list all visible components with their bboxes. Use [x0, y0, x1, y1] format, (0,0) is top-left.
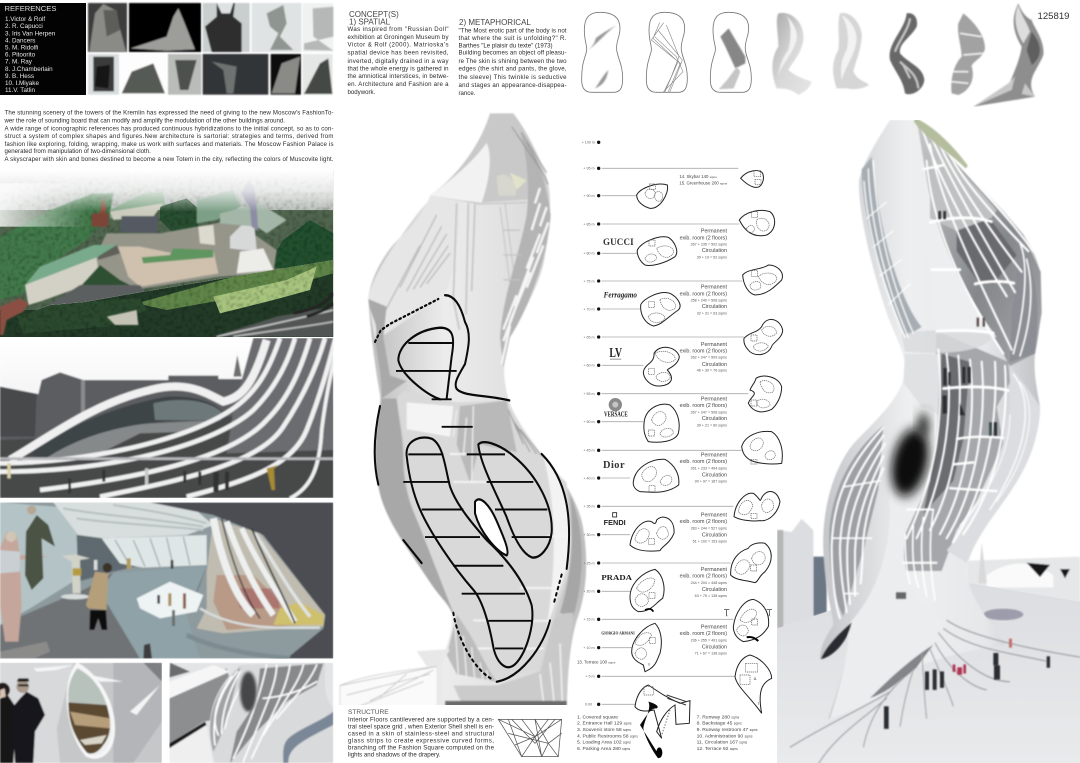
- text: Prada room data: exib. room (2 floors): [680, 574, 727, 580]
- plan: level 30: [630, 517, 674, 551]
- level markers: + 90 m: [583, 194, 595, 198]
- plan: level 40: [633, 459, 679, 492]
- legend: ground floor left: 5. Loading Area 102 sqms: [577, 740, 631, 746]
- text: Louis Vuitton room data: exib. room (2 floors): [680, 349, 727, 355]
- text: Versace room data: [680, 396, 728, 427]
- section markers A: [724, 609, 772, 618]
- text block: spatial: spatial device has been revisited,: [348, 50, 449, 56]
- level markers lower: [583, 449, 742, 707]
- text: Ferragamo room data: [680, 284, 728, 315]
- level markers: + 65 m: [583, 335, 595, 339]
- heading: concepts: CONCEPT(S): [349, 10, 399, 19]
- diagram: doll outline with swirl: [710, 12, 751, 92]
- dark void in facade: [885, 413, 935, 502]
- text: Louis Vuitton room data: Circulation: [702, 362, 727, 368]
- site plan: level 0: [635, 685, 690, 758]
- logo: Dior: Dior: [603, 460, 625, 471]
- text: Armani room data: 71 + 67 = 138 sqms: [695, 652, 727, 656]
- context: plaza ground: [777, 583, 1080, 763]
- plan: level 10: [632, 623, 661, 672]
- text block: spatial: [348, 26, 449, 96]
- list of references: 10. I.Miyake: [5, 80, 39, 87]
- logo: Louis Vuitton: [609, 346, 622, 361]
- model: pale volume two: [833, 13, 869, 89]
- void: white opening: [475, 499, 508, 555]
- plan: level 65: [744, 319, 783, 355]
- text block: intro: fashion like exploring, folding, wrapping, make us work with surfaces and materials. The Moscow Fashion Palace is: [4, 141, 334, 148]
- text block: intro: A skyscraper with skin and bones destined to become a new Totem in the city, reflecting the colors of Muscovite light.: [4, 156, 334, 163]
- level markers lower: + 5 m: [585, 675, 595, 679]
- text: Ferragamo room data: Circulation: [702, 304, 727, 310]
- text block: intro: The stunning scenery of the towers of the Kremlin has expressed the need of giving to the new Moscow's FashionTo-: [4, 110, 334, 116]
- level markers lower: + 10 m: [583, 646, 595, 650]
- panel: concepts text: [348, 10, 567, 97]
- text block: structure: cased in a skin of stainless-steel and structural: [348, 730, 494, 738]
- project number: 125819: [1038, 11, 1070, 22]
- plan: level 70: [641, 293, 680, 326]
- text block: metaphorical: "The Most erotic part of the body is not: [458, 28, 567, 34]
- text block: metaphorical: that where the suit is unfolding?" R.: [458, 35, 567, 42]
- heading: references: REFERENCES: [4, 4, 56, 13]
- plan: level 85: [739, 210, 775, 236]
- floor lines: [396, 343, 552, 648]
- plan: level 5: [735, 655, 772, 713]
- text: Louis Vuitton room data: Permanent: [701, 342, 728, 348]
- legend: ground floor left: [577, 714, 638, 752]
- level markers lower: + 20 m: [583, 590, 595, 594]
- diagram: doll outline with lines: [646, 12, 687, 92]
- text: Dior room data: Circulation: [702, 472, 727, 478]
- text: Fendi room data: Circulation: [702, 532, 727, 538]
- level markers: + 55 m: [583, 392, 595, 396]
- level markers lower: 0.00: [585, 703, 592, 707]
- text: Fendi room data: 283 + 244 = 527 sqms: [691, 526, 727, 530]
- list of references: 3. Iris Van Herpen: [5, 30, 56, 38]
- text: Versace room data: Permanent: [701, 396, 728, 402]
- text block: metaphorical: [458, 28, 567, 97]
- chart: floor plans by level: [577, 140, 783, 758]
- legend: ground floor left: 2. Entrance Hall 129 sqms: [577, 721, 632, 727]
- text: terrace level 10: 13. Terrace 100 sqms: [577, 659, 616, 664]
- text: Dior room data: 261 + 233 = 494 sqms: [691, 467, 727, 471]
- plan: level 5: 7: [757, 702, 759, 706]
- plan cut: dotted section: [375, 299, 438, 342]
- panel: references list: [0, 3, 86, 95]
- text block: structure: lights and shadows of the drapery.: [348, 752, 441, 758]
- people on floors and plaza: [884, 211, 1050, 729]
- legend: ground floor right: 9. Runway restroom 47 sqms: [697, 727, 758, 733]
- list of references: 8. J.Chamberlain: [5, 66, 53, 73]
- text block: metaphorical: the sleeve) This twinkle is seductive: [458, 74, 567, 81]
- text block: metaphorical: edges (the shirt and pants, the glove,: [458, 66, 567, 72]
- heading: spatial: 1) SPATIAL: [349, 17, 391, 26]
- text block: spatial: inverted, digitally drained in a way: [348, 58, 449, 65]
- plan: level 75: [743, 265, 782, 295]
- text block: metaphorical: rance.: [458, 90, 476, 97]
- level markers: + 50 m: [583, 420, 595, 424]
- text: Prada room data: Permanent: [701, 567, 728, 573]
- section markers A: A: [726, 614, 728, 618]
- logo: Fendi: [604, 513, 626, 527]
- text block: metaphorical: Building becomes an object off pleasu-: [458, 50, 566, 56]
- plan: level 45: [742, 431, 782, 464]
- text: brands Gucci room data: exib. room (2 floors): [680, 235, 727, 241]
- logo: Fendi: FENDI: [604, 518, 626, 527]
- text block: intro: [4, 110, 334, 163]
- skirt ribs fanning over the plaza: [790, 620, 1080, 763]
- greenery on top: [915, 120, 967, 167]
- legend: ground floor right: 10. Administration 90 sqms: [697, 733, 753, 739]
- text: Prada room data: 63 + 75 = 138 sqms: [695, 594, 727, 598]
- diagram: doll outline with creases: [582, 12, 623, 92]
- text: Dior room data: exib. room (2 floors): [680, 459, 727, 465]
- logo: Versace: [604, 398, 628, 419]
- plan: level 80: [637, 237, 677, 265]
- level markers lower: + 35 m: [583, 505, 595, 509]
- level markers: + 95 m: [583, 167, 595, 171]
- text block: spatial: the amniotical interstices, in betwe-: [348, 73, 448, 80]
- list of references: 6. Pitoorito: [5, 52, 36, 58]
- tower body: [820, 120, 1042, 719]
- text block: spatial: exhibition at Groningen Museum by: [348, 34, 449, 41]
- list of references: 7. M. Ray: [5, 58, 33, 66]
- level lines and labels upper: [582, 140, 783, 427]
- text block: spatial: that the whole energy is gathered in: [348, 66, 448, 72]
- photo: gallery interior with mannequins: [0, 502, 333, 659]
- logo: Versace: VERSACE: [604, 411, 628, 419]
- outer shell strokes: [375, 406, 569, 682]
- text block: intro: generated from manipulation of two-dimensional cloth.: [4, 148, 151, 155]
- text: Dior room data: [680, 453, 728, 484]
- plan cut: left ribbon floors: [407, 438, 532, 667]
- text: Fendi room data: [680, 513, 728, 544]
- logo: Ferragamo: Ferragamo: [603, 290, 637, 299]
- level markers: + 60 m: [583, 364, 595, 368]
- text: Versace room data: exib. room (2 floors): [680, 403, 727, 409]
- legend: ground floor left: 4. Public Restrooms 58 sqms: [577, 733, 638, 739]
- model: dark helix: [890, 13, 924, 94]
- context: bridge and buildings: [777, 519, 1080, 628]
- diagrams: concept evolution sequence: [582, 3, 1043, 107]
- level markers lower: + 40 m: [583, 476, 595, 480]
- heading: metaphorical: 2) METAPHORICAL: [459, 18, 531, 27]
- list of references: [5, 16, 56, 94]
- text block: metaphorical: and stages an appearance-disappea-: [458, 82, 566, 89]
- photo: view of the tower from a roof: [169, 663, 333, 763]
- text block: spatial: en. Architecture and Fashion are a: [348, 81, 449, 88]
- plan: level 35: [734, 491, 780, 521]
- model: floors helix: [951, 13, 985, 95]
- text: Ferragamo room data: 32 + 31 = 63 sqms: [697, 311, 727, 315]
- plan: level 15: [733, 599, 769, 642]
- text block: spatial: Was inspired from "Russian Doll": [348, 26, 448, 33]
- level markers: + 75 m: [583, 279, 595, 283]
- plan: level 50: [644, 404, 679, 442]
- photo: aerial view of the Kremlin: [0, 170, 333, 337]
- text block: structure: glass strips to create expressive curved forms,: [348, 738, 494, 744]
- plan: level 25: [731, 543, 771, 583]
- section drawing: central tower cutaway: [340, 113, 586, 728]
- diagram: space grid: [498, 719, 562, 757]
- photo: exterior plaza view with ribbons: [0, 338, 335, 498]
- text: Ferragamo room data: 258 + 240 = 508 sqms: [691, 298, 727, 302]
- model: pale volume one: [772, 13, 812, 95]
- text: Armani room data: 236 + 255 = 491 sqms: [691, 639, 727, 643]
- legend: ground floor left: 1. Covered square: [577, 714, 618, 720]
- plan cut: upper floor outline: [398, 328, 453, 399]
- list of references: 11.V. Tatlin: [5, 87, 35, 94]
- text: Prada room data: [680, 567, 728, 598]
- legend: ground floor right: [697, 714, 758, 752]
- level markers: [582, 140, 748, 424]
- text block: metaphorical: Barthes "Le plaisir du texte" (1973): [458, 42, 553, 50]
- list of references: 9. B. Hess: [5, 73, 34, 80]
- plan: level 10: b: [648, 663, 650, 667]
- text: Ferragamo room data: exib. room (2 floors): [680, 291, 727, 297]
- plan: level 55: [748, 376, 782, 412]
- text: skybar and greenhouse: 15. Greenhouse 200 sqms: [679, 180, 728, 185]
- text: Dior room data: 90 + 97 = 187 sqms: [695, 480, 727, 484]
- plan: level 20: [630, 569, 664, 612]
- text: brands Gucci room data: [680, 229, 728, 259]
- list of references: 1.Victor & Rolf: [5, 16, 45, 23]
- text: Armani room data: exib. room (2 floors): [680, 631, 727, 637]
- model: final tower form: [973, 3, 1043, 107]
- level markers: + 70 m: [583, 307, 595, 311]
- plan cut: upper wall outline: [445, 295, 509, 400]
- panel: reference thumbnails: [88, 3, 333, 95]
- photo: interior with visitors and oval window: [0, 663, 162, 763]
- text: brands Gucci room data: 267 + 235 = 502 sqms: [691, 243, 727, 247]
- legend: ground floor right: 12. Terrace 92 sqms: [697, 746, 738, 752]
- level markers: + 80 m: [583, 252, 595, 256]
- text: brands Gucci room data: Permanent: [701, 229, 728, 235]
- plan cut: right ribbon floors: [478, 442, 552, 558]
- level markers lower: + 30 m: [583, 533, 595, 537]
- text block: intro: A wide range of iconographic references has produced continuous hybridizations to the initial concept, so as to con-: [4, 126, 333, 132]
- level markers lower: + 25 m: [583, 561, 595, 565]
- text block: intro: wer the role of sounding board that can modify and amplify the modulation of the other buildings around.: [4, 118, 285, 124]
- text block: spatial: Victor & Rolf (2000). Matrioska's: [348, 42, 448, 48]
- plan: skybar and greenhouse: [741, 171, 763, 187]
- text block: structure: branching off the Fashion Square computed on the: [348, 744, 495, 752]
- list of references: 5. M. Ridolfi: [5, 44, 38, 52]
- text: brands Gucci room data: 30 + 19 = 52 sqms: [697, 255, 727, 259]
- text: Louis Vuitton room data: 262 + 247 = 509 sqms: [691, 356, 727, 360]
- text: skybar and greenhouse: 14. Skybar 140 sqms: [679, 174, 717, 179]
- text: Versace room data: 39 + 21 = 60 sqms: [697, 423, 727, 427]
- facade ribs: [832, 126, 1033, 618]
- text: Armani room data: Circulation: [702, 644, 727, 650]
- list of references: 4. Dancers: [5, 38, 35, 44]
- panel: structure: [335, 705, 578, 763]
- text: Versace room data: 267 + 247 = 508 sqms: [691, 410, 727, 414]
- text: Fendi room data: 51 + 102 = 153 sqms: [693, 540, 727, 544]
- level markers lower: + 45 m: [583, 449, 595, 453]
- text: Prada room data: Circulation: [702, 587, 727, 593]
- text: Fendi room data: Permanent: [701, 513, 728, 519]
- logo: Louis Vuitton: LV: [609, 346, 622, 361]
- text: Armani room data: Permanent: [701, 625, 728, 631]
- level markers: + 100 m: [582, 140, 595, 144]
- level markers: + 85 m: [583, 222, 595, 226]
- dotted shell strokes: [453, 575, 562, 680]
- level lines and plans lower: [577, 404, 782, 758]
- text block: intro: struct a system of complex shapes and figures.New architecture is sartorial: strategies and terms, derived from: [4, 133, 333, 140]
- render: tower on its plaza: [777, 120, 1080, 763]
- text: Fendi room data: exib. room (2 floors): [680, 519, 727, 525]
- logo: Prada: PRADA: [601, 574, 632, 582]
- text block: spatial: bodywork.: [348, 89, 376, 96]
- level markers lower: + 15 m: [583, 618, 595, 622]
- legend: ground floor right: 7. Runway 280 sqms: [697, 714, 740, 720]
- plan: level 60: [643, 347, 679, 386]
- heading: structure: STRUCTURE: [348, 709, 389, 716]
- plan: level 5: 11: [753, 677, 757, 681]
- text: skybar and greenhouse: [679, 174, 728, 185]
- text block: structure: Interior Floors cantilevered are supported by a cen-: [348, 716, 494, 724]
- legend: ground floor right: 11. Circulation 167 sqms: [697, 740, 748, 746]
- legend: ground floor left: 3. Souvenir store 58 sqms: [577, 727, 631, 733]
- text: Prada room data: 244 + 204 = 448 sqms: [691, 581, 727, 585]
- text block: structure: tral steel space grid , when Exterior Shell shell is en-: [348, 724, 494, 730]
- legend: ground floor left: 6. Parking Area 280 sqms: [577, 746, 630, 752]
- text: Armani room data: [680, 625, 728, 656]
- logo: Giorgio Armani: GIORGIO ARMANI: [601, 630, 635, 635]
- text: Versace room data: Circulation: [702, 416, 727, 422]
- text: Ferragamo room data: Permanent: [701, 284, 728, 290]
- text: brands Gucci room data: Circulation: [702, 248, 727, 254]
- text block: metaphorical: re The skin is shining between the two: [458, 58, 567, 65]
- list of references: 2. R. Capucci: [5, 23, 43, 30]
- text block: structure: [348, 716, 495, 758]
- text: Dior room data: Permanent: [701, 453, 728, 459]
- legend: ground floor right: 8. Backstage 45 sqms: [697, 721, 742, 727]
- plan: level 90: [637, 184, 668, 208]
- logo: Gucci: GUCCI: [603, 237, 634, 247]
- section markers A: A: [768, 614, 770, 618]
- text: Louis Vuitton room data: 46 + 30 = 76 sqms: [697, 369, 727, 373]
- text: Louis Vuitton room data: [680, 342, 728, 373]
